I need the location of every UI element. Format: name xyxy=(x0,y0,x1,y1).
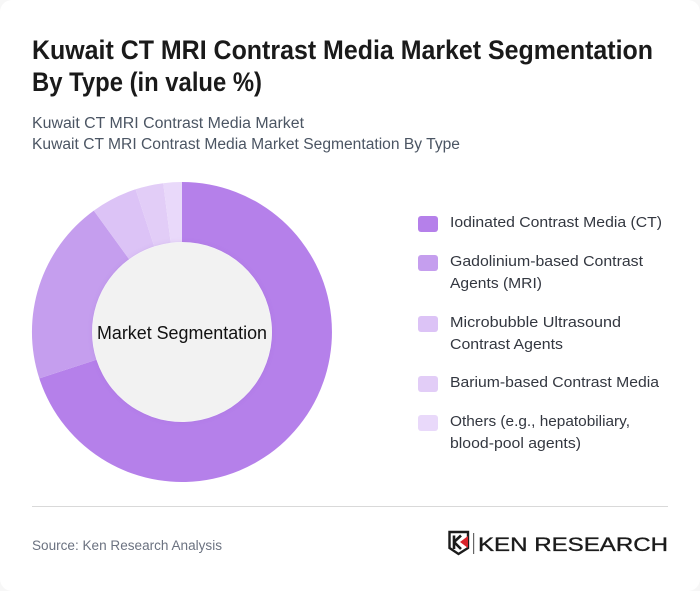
source: Source: Ken Research Analysis xyxy=(32,538,222,553)
segment: Barium-based 3% xyxy=(136,183,171,246)
icon: K shield xyxy=(450,532,468,554)
donut chart xyxy=(32,182,332,482)
logo: Ken Research xyxy=(450,532,668,556)
center label: Market Segmentation xyxy=(97,323,267,343)
segment: Microbubble 5% xyxy=(94,189,154,259)
segment: Gadolinium-based 20% xyxy=(32,211,129,378)
legend item: Others xyxy=(418,413,630,452)
legend item: Iodinated: Iodinated Contrast Media (CT) xyxy=(450,214,662,231)
legend item: Gadolinium: Agents (MRI) xyxy=(450,275,542,292)
segment: Iodinated Contrast Media 70% xyxy=(39,182,332,482)
legend item: Microbubble: Contrast Agents xyxy=(450,336,563,353)
legend item: Gadolinium: Gadolinium-based Contrast xyxy=(450,253,644,270)
donut center xyxy=(92,242,272,422)
title: Kuwait CT MRI Contrast Media Market Segmentation xyxy=(32,35,653,65)
legend item: Microbubble: Microbubble Ultrasound xyxy=(450,314,621,331)
legend item: Others: blood-pool agents) xyxy=(450,435,581,452)
title xyxy=(32,35,653,97)
legend xyxy=(418,214,662,452)
legend item: Barium: Barium-based Contrast Media xyxy=(450,374,660,391)
subtitle: Kuwait CT MRI Contrast Media Market Segmentation By Type xyxy=(32,136,460,153)
legend item: Others: Others (e.g., hepatobiliary, xyxy=(450,413,630,430)
legend item: Gadolinium xyxy=(418,253,644,292)
legend item: Microbubble xyxy=(418,314,621,353)
logo wordmark: KEN RESEARCH xyxy=(478,535,668,556)
subtitle xyxy=(32,115,460,153)
title: By Type (in value %) xyxy=(32,67,262,97)
subtitle: Kuwait CT MRI Contrast Media Market xyxy=(32,115,305,132)
segment: Others 2% xyxy=(163,182,182,243)
